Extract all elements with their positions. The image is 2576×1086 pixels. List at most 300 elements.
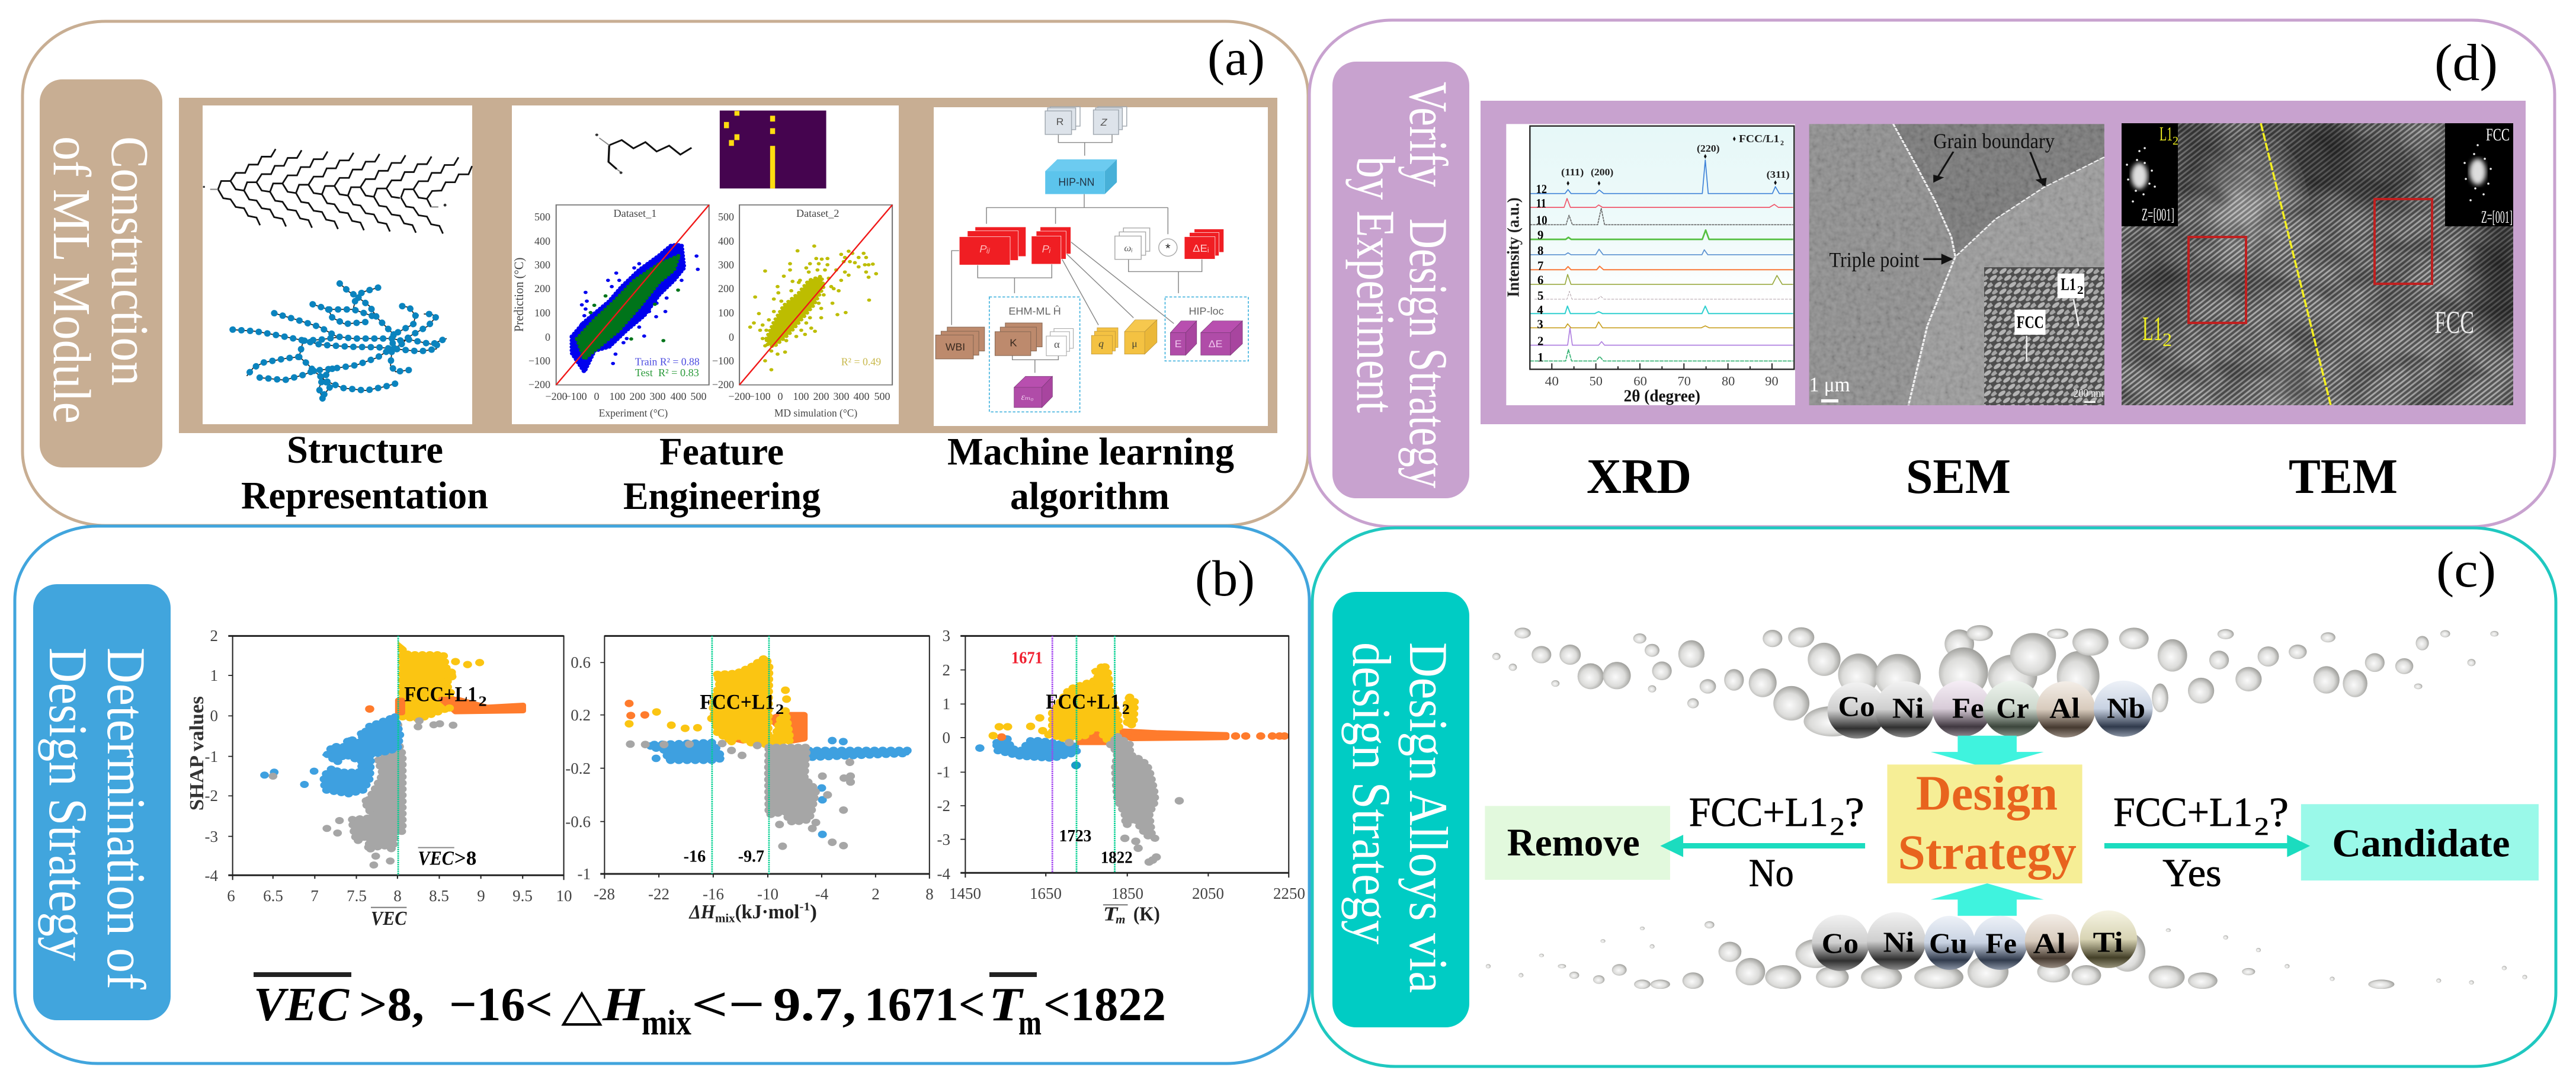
grain boundary label [1933,130,2055,187]
chart tick labels: 8 [925,885,934,903]
upper element spheres: Ni [1892,693,1924,724]
SHAP chart: mixing enthalpy [600,636,930,925]
x axis title: ΔH [688,901,716,922]
scatter axis tick labels: 100 [718,307,734,319]
panel a side label: of ML Module [42,136,101,424]
heading: structure representation: Representation [241,474,488,517]
purple cubes [1014,321,1242,408]
machine learning algorithm diagram: α [1054,339,1060,350]
TEM micrograph [2122,101,2524,415]
sample numbers: 9 [1537,229,1543,242]
scatter plot dataset 1: Train R² = 0.88 [635,357,700,368]
phase labels [2142,305,2474,350]
icon: blue bead polymer chains [233,283,447,400]
headings: XRD SEM TEM [1587,449,2398,504]
machine learning algorithm diagram: εₘₒ [1021,392,1034,402]
machine learning algorithm diagram [934,107,1268,426]
sample numbers: 8 [1537,245,1543,258]
scatter plot dataset 1: Test R² = 0.83 [635,368,699,379]
alloy flow diagram: ? [1845,789,1864,835]
x axis title [688,899,817,925]
scatter axis tick labels: 100 [534,307,550,319]
region labels [684,690,784,866]
threshold line [396,636,401,875]
brown stacks [935,323,1042,359]
chart tick labels: -1 [205,748,218,765]
upper element spheres: Fe [1952,693,1984,724]
scatter axis tick labels: 400 [671,390,686,402]
panel c side label: Design Alloys via [1398,642,1459,993]
peak indices: (111) [1561,166,1584,178]
icon: small molecule [595,134,691,174]
phase labels: FCC [2434,305,2474,340]
XRD axis labels: 40 [1545,374,1559,389]
panel c side label [1332,592,1469,1027]
design strategy formula: <− [691,979,765,1031]
chart tick labels: -3 [205,828,218,845]
sample numbers: 7 [1537,260,1543,273]
machine learning algorithm diagram: EHM-ML Ĥ [1008,305,1061,317]
left FFT inset: Z=[001] [2142,205,2174,225]
arrow to remove [1660,835,1865,857]
yellow points [629,658,790,745]
peak indices: FCC/L1 [1739,133,1779,145]
scatter plot dataset 1: Dataset_1 [614,209,656,220]
scatter axis tick labels: 500 [534,211,550,223]
chart tick labels: -3 [937,831,950,848]
panel b side label: Determination of [96,648,156,989]
design strategy formula: mix [642,1003,691,1042]
region labels: -16 [684,847,706,866]
scatter axis tick labels: 200 [813,390,829,402]
scatter plot dataset 2: MD simulation (°C) [774,408,857,419]
crop strip under lower spheres [1480,989,2537,1011]
region labels: VEC [418,848,454,869]
region labels: 2 [479,693,487,709]
chart tick labels: -4 [937,865,950,883]
lower element spheres: Ni [1883,927,1914,958]
scale bar [1809,373,1850,402]
triple point label [1829,248,1953,272]
chart tick labels: -4 [205,867,218,885]
peak indices: (200) [1591,166,1613,178]
chart tick labels: 3 [942,627,950,645]
design strategy box [1887,764,2082,883]
x axis title: T [1103,904,1119,925]
plot frame [960,636,1289,877]
sample numbers: 12 [1536,183,1547,196]
chart tick labels [205,627,1305,905]
machine learning algorithm diagram: K [1010,337,1017,349]
lower element spheres: Ti [2093,927,2123,958]
design strategy formula: >8, [359,979,424,1031]
lower background spheres [1486,921,2527,989]
left FFT inset: 2 [2173,134,2178,148]
chart tick labels: -1 [937,763,950,781]
chart tick labels: 8.5 [429,887,449,905]
scatter axis tick labels: −200 [545,390,568,402]
yes branch label: 2 [2254,812,2269,841]
chart tick labels: 7 [310,887,319,905]
sample numbers: 11 [1536,197,1546,210]
lower element spheres: Co [1822,928,1859,959]
HIP-NN cube: HIP-NN [1058,176,1094,188]
chart tick labels: 1450 [949,885,981,902]
machine learning algorithm diagram: R [1056,116,1064,127]
region labels: 1723 [1059,826,1091,845]
blue points [980,736,1108,765]
lower element spheres: Al [2033,928,2066,959]
heading: machine learning algorithm: algorithm [1010,475,1170,518]
tan frame [179,98,1277,433]
lower element spheres [1812,911,2137,971]
scatter plot dataset 1: Prediction (°C) [512,258,527,332]
yes branch label [2113,789,2289,895]
phase labels: 2 [2162,329,2172,350]
chart tick labels: 2 [210,627,218,645]
design strategy formula: 9.7, [773,979,856,1031]
scatter axis tick labels: 300 [649,390,666,402]
chart tick labels: -10 [757,885,778,903]
region labels: >8 [454,848,476,869]
chart tick labels: 1650 [1030,885,1062,902]
chart tick labels: 0 [942,729,950,747]
machine learning algorithm diagram: ΔEᵢ [1193,242,1209,254]
upper element spheres [1827,681,2153,739]
heading: structure representation [241,428,488,517]
upper element spheres: Al [2049,693,2080,724]
heading: structure representation: Structure [287,428,443,472]
chart tick labels: 0.2 [571,706,591,724]
machine learning algorithm diagram: HIP-loc [1188,305,1224,317]
design strategy formula: H [602,979,646,1031]
scatter plot dataset 1: Experiment (°C) [599,408,668,419]
sample numbers [1536,183,1547,364]
panel c side label: design Strategy [1341,642,1402,944]
headings: XRD SEM TEM: SEM [1906,449,2011,504]
scatter axis tick labels: −100 [565,390,587,402]
plot frame [600,636,930,879]
yes branch label: Yes [2162,851,2222,895]
machine learning algorithm diagram: ΔE [1209,338,1222,350]
inset labels [2014,274,2104,403]
chart tick labels: -22 [648,885,669,903]
candidate box [2301,804,2539,880]
region labels [404,682,487,869]
alloy flow diagram: ? [2269,789,2289,835]
chart tick labels: 10 [556,887,572,905]
yellow points [402,650,454,719]
panel letter c: (c) [2436,541,2496,598]
machine learning algorithm diagram: ωᵢ [1124,242,1133,254]
machine learning algorithm diagram: q [1098,338,1104,349]
x axis title: mix [715,911,735,925]
right FFT inset: FCC [2486,125,2510,145]
peak indices: (311) [1767,169,1790,180]
region labels: 2 [1122,701,1130,717]
design strategy box: Design [1916,765,2058,821]
scatter axis tick labels: 500 [718,211,734,223]
scatter axis tick labels: 500 [874,390,890,402]
dashed output groups [989,297,1248,412]
chart tick labels: 6 [227,887,235,905]
alloy flow diagram: Strategy [1898,825,2077,880]
phase labels: L1 [2142,309,2162,348]
design strategy formula: −16< [449,979,553,1031]
alloy flow diagram [1480,625,2539,1011]
grey points [273,721,453,865]
SEM micrograph: 1 μm [1809,373,1850,396]
scatter axis tick labels: 0 [777,390,783,402]
heading: feature engineering: Feature [659,430,784,473]
upper element spheres: Nb [2107,693,2145,724]
upper element spheres: Co [1838,691,1875,722]
scatter axis tick labels: 400 [853,390,870,402]
chart tick labels: 7.5 [347,887,367,905]
design strategy formula: <1822 [1043,979,1166,1031]
sample numbers: 6 [1537,274,1543,287]
threshold lines [1052,636,1115,873]
design strategy formula: 1671< [864,979,985,1031]
machine learning algorithm diagram: Z [1100,116,1108,128]
right FFT inset: Z=[001] [2481,207,2513,227]
scatter plot dataset 2: Dataset_2 [796,209,839,220]
region labels: FCC+L1 [700,690,775,714]
sample numbers: 1 [1537,351,1543,364]
peak indices [1561,133,1790,185]
scatter axis tick labels: 200 [718,283,734,294]
XRD axis labels [1504,197,1779,405]
peak indices: (220) [1697,143,1720,154]
heading: machine learning algorithm [947,430,1234,518]
precipitate inset [1984,267,2104,405]
fingerprint heatmap [720,111,826,188]
grey points [1069,736,1179,862]
SEM micrograph: Grain boundary [1933,130,2055,153]
chart tick labels: 1850 [1111,885,1143,902]
yellow boundary line [2261,123,2331,405]
panel d side label: by Experiment [1345,156,1406,413]
inset labels: 2 [2077,283,2084,296]
blue points [264,717,400,794]
left FFT inset: L1 [2160,123,2173,145]
chart tick labels: 1 [942,695,950,713]
arrow up into strategy [1931,883,2044,916]
connectors [951,134,1202,373]
XRD chart [1504,124,1795,405]
arrow to candidate [2104,835,2310,857]
panel d: verify design strategy by experiment: 200 nm [2074,386,2104,399]
HIP-NN cube [1045,159,1117,194]
no branch label [1689,789,1864,895]
scatter axis tick labels: 300 [534,259,550,271]
scatter axis tick labels: −200 [712,379,734,390]
design strategy formula: △ [561,978,603,1031]
region labels: 1671 [1011,648,1043,667]
orange points [1002,731,1284,742]
scatter axis tick labels: 0 [545,331,550,343]
design strategy formula: VEC [254,979,350,1031]
panel d: verify design strategy by experiment [1309,20,2555,527]
grey points [630,744,851,846]
orange points [629,703,804,741]
scatter axis tick labels: 0 [729,331,734,343]
remove box: Remove [1507,821,1640,864]
triple point label: Triple point [1829,248,1920,272]
chart tick labels: -4 [815,885,829,903]
scatter axis tick labels: 500 [691,390,706,402]
x axis title [1103,904,1160,927]
structure representation figure [203,105,472,424]
region labels: 1822 [1101,848,1133,867]
diffraction traces [1530,160,1793,361]
heading: feature engineering: Engineering [623,475,821,518]
XRD axis labels: 80 [1722,374,1735,389]
region labels [1011,648,1133,867]
chart tick labels: 0.6 [571,653,591,671]
SHAP chart: VEC [185,636,564,930]
chart tick labels: 2 [942,661,950,679]
scatter axis tick labels: 300 [833,390,850,402]
grain boundaries [1893,124,2104,405]
SEM micrograph [1809,124,2104,405]
purple frame [1481,101,2526,424]
chart tick labels: 0 [210,707,218,725]
scatter axis tick labels: −100 [528,355,550,367]
chart tick labels: 6.5 [263,887,283,905]
white stack and operator [1115,228,1177,260]
inset labels: L1 [2061,274,2076,294]
scatter plot dataset 1 [512,205,709,419]
headings: XRD SEM TEM: XRD [1587,449,1691,504]
chart tick labels: -28 [594,885,615,903]
chart tick labels: -2 [937,797,950,815]
red stacks [959,227,1224,265]
scatter axis tick labels: 400 [718,235,734,247]
chart tick labels: 9.5 [512,887,533,905]
panel b: determination of design strategy [15,526,1309,1063]
orange points [370,662,523,713]
yes branch label: FCC+L1 [2113,789,2253,835]
panel b side label [33,584,171,1020]
icon: comb polymer skeleton [203,149,472,233]
SHAP chart: melting temperature [960,636,1289,927]
region labels: 2 [776,701,784,717]
machine learning algorithm diagram: Pᵢ [1042,243,1051,255]
sample numbers: 5 [1537,290,1543,303]
chart tick labels: 1 [210,667,218,684]
machine learning algorithm diagram: E [1175,338,1182,350]
scatter plot dataset 2: R² = 0.49 [841,357,881,368]
scatter plot dataset 2 [739,205,892,419]
sample numbers: 10 [1536,214,1547,227]
panel letter d: (d) [2434,34,2498,92]
panel d side label: Verify Design Strategy [1398,82,1459,488]
arrow down into strategy [1931,736,2044,768]
sample numbers: 4 [1537,304,1543,317]
sample numbers: 2 [1537,335,1543,348]
scatter axis tick labels: 200 [629,390,646,402]
panel b side label: Design Strategy [38,648,98,961]
yellow stack and cube [1091,320,1157,354]
panel d side label [1332,62,1469,498]
right FFT inset [2445,123,2513,227]
x axis title: -1 [799,899,810,913]
scatter axis tick labels: 300 [718,259,734,271]
chart tick labels: 9 [477,887,485,905]
x axis title: (K) [1133,904,1160,925]
peak indices: 2 [1780,139,1784,147]
blue points [649,741,907,834]
chart tick labels: -2 [205,787,218,805]
x axis title: (kJ·mol [735,901,799,922]
machine learning algorithm diagram: μ [1132,338,1138,349]
XRD axis labels: 50 [1590,374,1603,389]
panel a side label: Construction [100,136,159,386]
chart tick labels: -16 [703,885,724,903]
inset labels: FCC [2017,312,2044,332]
machine learning algorithm diagram: * [1165,241,1171,255]
chart tick labels: 8 [393,887,402,905]
chart tick labels: -1 [577,865,591,883]
heading: feature engineering [623,430,821,518]
scatter axis tick labels: −200 [528,379,550,390]
red selection boxes [2189,199,2432,323]
no branch label: No [1749,851,1794,895]
scatter axis tick labels: 200 [534,283,550,294]
scatter axis tick labels: −100 [712,355,734,367]
heading: machine learning algorithm: Machine learning [947,430,1234,473]
left FFT inset [2122,123,2178,226]
machine learning algorithm diagram: Pᵢⱼ [979,243,991,255]
XRD axis labels: 2θ (degree) [1624,387,1700,405]
panel c: design alloys via design strategy [1312,528,2556,1066]
x axis title: VEC [371,908,407,930]
lower element spheres: Cu [1929,928,1968,959]
scatter axis tick labels: 100 [609,390,626,402]
region labels: FCC+L1 [1046,690,1120,713]
scatter axis tick labels: 100 [793,390,809,402]
chart tick labels: 2 [872,885,880,903]
input stacks R and Z [1045,107,1127,134]
XRD axis labels: 60 [1633,374,1647,389]
y axis title: SHAP values [185,696,208,811]
XRD axis labels: 70 [1678,374,1691,389]
chart tick labels: 2250 [1273,885,1305,902]
XRD axis labels: Intensity (a.u.) [1504,197,1523,297]
remove box [1485,806,1670,880]
scatter axis tick labels: 400 [534,235,550,247]
sample numbers: 3 [1537,318,1543,331]
upper element spheres: Cr [1996,693,2029,724]
upper background spheres [1492,625,2498,736]
x axis title: ) [810,901,817,922]
lower element spheres: Fe [1985,928,2017,959]
region labels: -9.7 [738,847,764,866]
no branch label: FCC+L1 [1689,789,1828,835]
scatter axis tick labels: −100 [748,390,771,402]
x axis title: m [1116,912,1125,927]
panel letter b: (b) [1195,550,1255,607]
panel a side label [40,79,162,467]
yellow points [993,665,1135,741]
design strategy formula: T [989,979,1024,1031]
scatter axis tick labels: 0 [594,390,600,402]
feature engineering figure [241,105,1268,518]
design strategy formula: m [1018,1003,1042,1042]
scatter axis tick labels: −200 [728,390,751,402]
headings: XRD SEM TEM: TEM [2289,449,2398,504]
